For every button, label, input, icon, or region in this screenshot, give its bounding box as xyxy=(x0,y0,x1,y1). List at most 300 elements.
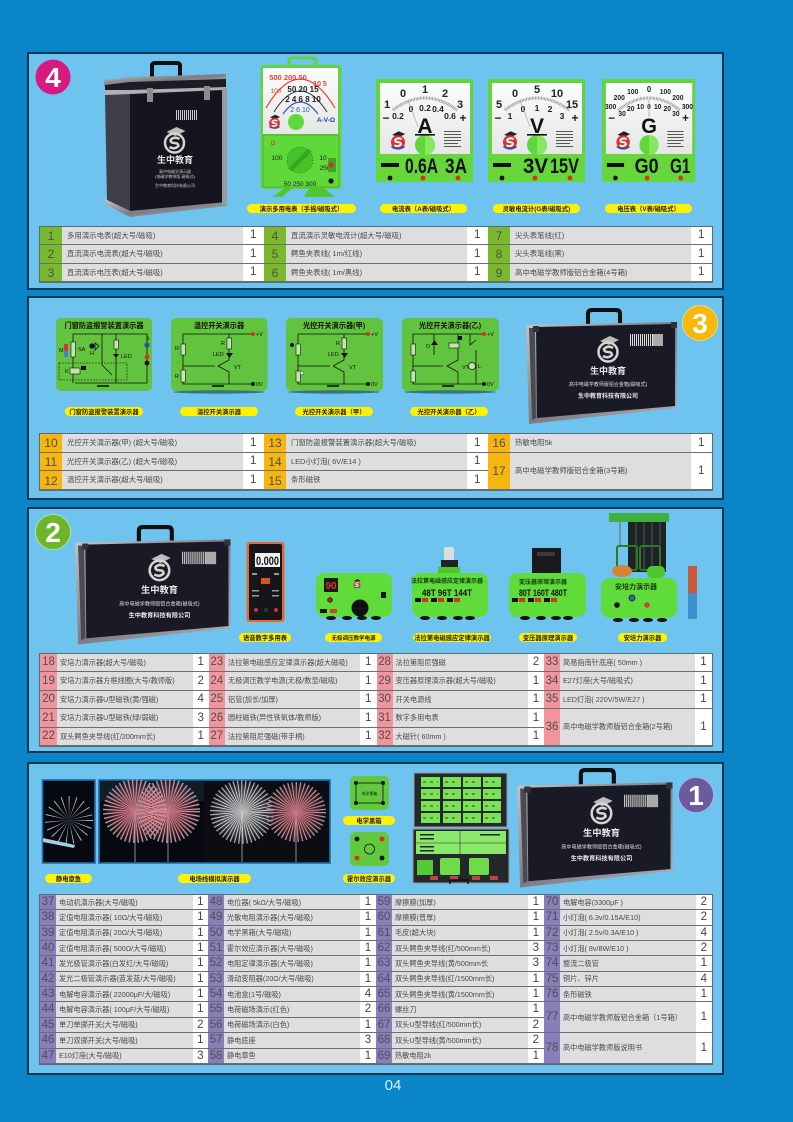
table: box 1 parts list: 光敏电阻演示器(大号/磁吸) xyxy=(227,913,313,922)
table: box 3 parts list: 17 xyxy=(492,464,506,478)
label: field lines xyxy=(178,874,251,883)
table: box 1 parts list: 76 xyxy=(546,988,558,1000)
table: box 1 parts list: 41 xyxy=(42,957,54,969)
table: box 1 parts list: 1 xyxy=(365,957,371,969)
table: box 1 parts list: 1 xyxy=(197,1034,204,1046)
label: light switch B: 光控开关演示器（乙） xyxy=(418,407,480,416)
table: box 1 parts list: 电位器( 5kΩ/大号/磁吸) xyxy=(227,898,301,907)
label: Hall effect xyxy=(343,874,395,883)
table: box 1 parts list: 49 xyxy=(210,911,222,923)
meter: galvanometer: − xyxy=(608,112,615,125)
table: box 4 parts list: 鳄鱼夹表线( 1m/黑线) xyxy=(291,268,362,277)
table: box 3 parts list: 13 xyxy=(268,436,282,450)
table: box 2 parts list: 30 xyxy=(378,693,391,705)
photo: transformer demonstrator: 80T 160T 480T xyxy=(519,588,567,598)
table: box 1 parts list: 毛皮(超大块) xyxy=(395,928,436,937)
table: box 1 parts list: 63 xyxy=(378,957,390,969)
meter: voltmeter: 3V xyxy=(523,155,548,178)
board: light switch B: D xyxy=(426,344,430,350)
board: temperature switch: R xyxy=(175,346,179,352)
board: light switch B: +V xyxy=(487,332,494,338)
meter: galvanometer: 30 xyxy=(672,111,680,118)
table: box 2 parts list: 1 xyxy=(700,721,707,733)
meter: galvanometer: 30 xyxy=(618,111,626,118)
table: box 2 parts list: 32 xyxy=(378,730,391,742)
table: box 1 parts list: 58 xyxy=(210,1050,222,1062)
board: light switch B: L xyxy=(478,364,481,370)
table: box 1 parts list: 电荷磁场演示(红色) xyxy=(227,1005,289,1014)
board: light switch B: VT xyxy=(462,365,470,371)
label: demo multimeter: 演示多用电表（手摇/磁吸式） xyxy=(260,204,343,213)
table: box 1 parts list: 1 xyxy=(365,1050,371,1062)
table: box 2 parts list: 开关电源线 xyxy=(396,695,431,704)
table: box 3 parts list: 条形磁铁 xyxy=(291,475,321,484)
meter: voltmeter: 3 xyxy=(560,111,565,121)
photo: upright aluminium case: 生中教育 xyxy=(157,154,193,165)
meter: ammeter: 3A xyxy=(445,155,467,178)
table: box 1 parts list: 50 xyxy=(210,927,222,939)
label: field lines: 电场线模拟演示器 xyxy=(189,874,240,883)
table: box 4 parts list: 尖头表笔线(黑) xyxy=(515,249,564,258)
table: box 2 parts list: 双头鳄鱼夹导线(红/200mm长) xyxy=(60,732,155,741)
meter: galvanometer xyxy=(602,79,695,182)
meter: voltmeter: 0 xyxy=(512,88,518,100)
table: box 2 parts list: 数字多用电表 xyxy=(396,713,439,722)
board: light switch A: 0V xyxy=(371,382,378,388)
board: temperature switch: 0V xyxy=(256,382,263,388)
table: box 1 parts list: 2 xyxy=(701,896,707,908)
photo: transformer demonstrator xyxy=(509,548,586,620)
table: box 2 parts list: 1 xyxy=(533,693,539,705)
label: digital multimeter xyxy=(239,633,291,642)
board: light switch B: 光控开关演示器(乙) xyxy=(419,321,482,330)
table: box 4 parts list: 直流演示电流表(超大号/磁吸) xyxy=(67,249,163,258)
meter: voltmeter: 15 xyxy=(566,99,578,111)
table: box 1 parts list: 71 xyxy=(546,911,558,923)
table: box 4 parts list: 1 xyxy=(250,248,256,260)
table: box 1 parts list: 1 xyxy=(365,1019,371,1031)
table: box 2 parts list: 1 xyxy=(533,712,539,724)
photo: demo multimeter: 100 xyxy=(272,155,283,162)
meter: ammeter: 3 xyxy=(457,99,463,111)
table: box 1 parts list: 双头鳄鱼夹导线(黄/500mm长 xyxy=(395,959,488,968)
table: box 3 parts list: 10 xyxy=(44,436,58,450)
table: box 1 parts list: 条形磁铁 xyxy=(563,990,592,999)
table: box 1 parts list: 1 xyxy=(197,911,204,923)
photo: aluminium case no. 2: 生中教育科技有限公司 xyxy=(129,612,190,620)
table: box 1 parts list: 46 xyxy=(42,1034,54,1046)
table: box 1 parts list: 高中电磁学教师版铝合金箱（1号箱） xyxy=(563,1013,682,1022)
table: box 3 parts list: 11 xyxy=(45,455,57,469)
table: box 1 parts list: 1 xyxy=(197,942,204,954)
photo: Faraday law demonstrator xyxy=(411,547,488,620)
table: box 1 parts list: 40 xyxy=(42,942,54,954)
table: box 2 parts list: 31 xyxy=(378,712,391,724)
photo: demo multimeter: 2 4 6 8 10 xyxy=(285,95,321,104)
photo: electric field line simulator xyxy=(99,779,330,863)
photo: demo multimeter: Ω xyxy=(271,140,276,147)
board: light switch A: VT xyxy=(349,365,357,371)
table: box 1 parts list: 双头鳄鱼夹导线(红/500mm长) xyxy=(395,944,490,953)
table: box 2 parts list: 25 xyxy=(210,693,223,705)
table: box 1 parts list: 62 xyxy=(378,942,390,954)
table: box 1 parts list: 3 xyxy=(533,957,539,969)
meter: voltmeter: 5 xyxy=(534,84,540,96)
board: Hall effect demonstrator xyxy=(350,832,389,866)
badge: number 2: 2 xyxy=(45,517,61,548)
label: power supply xyxy=(325,633,382,642)
table: box 3 parts list: 15 xyxy=(268,474,282,488)
meter: ammeter: A xyxy=(417,115,433,138)
photo: aluminium case no. 1 xyxy=(517,770,673,887)
meter: ammeter: − xyxy=(382,111,390,125)
table: box 3 parts list: LED小灯泡( 6V/E14 ) xyxy=(291,457,361,466)
table: box 1 parts list: 45 xyxy=(42,1019,54,1031)
photo: demo multimeter: 250 xyxy=(320,165,331,172)
table: box 1 parts list: 热敏电阻2k xyxy=(395,1051,431,1060)
label: Ampere force: 安培力演示器 xyxy=(624,633,662,642)
meter: ammeter: 1 xyxy=(384,99,390,111)
table: box 2 parts list: 1 xyxy=(533,675,539,687)
table: box 1 parts list: 滑动变阻器(20Ω/大号/磁吸) xyxy=(227,974,314,983)
table: box 1 parts list: 双头鳄鱼夹导线(红/1500mm长) xyxy=(395,974,494,983)
photo: demo multimeter: 100 xyxy=(271,88,282,95)
photo: aluminium case no. 1: 高中电磁学教师版铝合金箱(磁吸式) xyxy=(561,842,642,850)
table: box 2 parts list: 27 xyxy=(210,730,223,742)
meter: voltmeter: V xyxy=(530,115,544,138)
table: box 1 parts list: 56 xyxy=(210,1019,222,1031)
meter: ammeter: 0.6 xyxy=(444,111,456,121)
board: door and window alarm: 门窗防盗报警装置演示器 xyxy=(64,321,144,330)
table: box 2 parts list: 变压器原理演示器(超大号/磁吸) xyxy=(396,676,496,685)
photo: bar magnet xyxy=(688,566,697,619)
table: box 2 parts list: 1 xyxy=(365,730,371,742)
page number: 04 xyxy=(385,1077,401,1094)
meter: ammeter: 0 xyxy=(409,104,414,114)
meter: ammeter: 1 xyxy=(422,84,428,96)
table: box 4 parts list xyxy=(39,226,713,283)
badge: number 4: 4 xyxy=(45,62,61,93)
meter: galvanometer: 20 xyxy=(664,106,671,113)
table: box 1 parts list: 发光二极管演示器(蓝发蓝/大号/磁吸) xyxy=(59,974,176,983)
table: box 2 parts list: 安培力演示器U型磁铁(黄/强磁) xyxy=(60,695,158,704)
table: box 2 parts list: 1 xyxy=(198,656,204,668)
photo: digital multimeter: 0.000 xyxy=(256,554,279,568)
label: power supply: 无极调压教学电源 xyxy=(331,634,376,642)
table: box 2 parts list: 圆柱磁铁(异性铁氧体/教师版) xyxy=(228,713,321,722)
meter: voltmeter: 10 xyxy=(551,88,563,100)
table: box 3 parts list: 光控开关演示器(甲) (超大号/磁吸) xyxy=(67,438,177,447)
table: box 3 parts list: 1 xyxy=(698,437,704,449)
table: box 4 parts list: 9 xyxy=(496,266,502,280)
table: box 1 parts list: 1 xyxy=(533,988,539,1000)
board: door and window alarm: K xyxy=(65,369,69,375)
label: Ampere force xyxy=(618,633,667,642)
table: box 1 parts list: 59 xyxy=(378,896,390,908)
table: box 1 parts list: 78 xyxy=(546,1042,558,1054)
photo: aluminium case no. 3: 高中电磁学教师版铝合金箱(磁吸式) xyxy=(569,381,647,388)
table: box 3 parts list: 温控开关演示器(超大号/磁吸) xyxy=(67,475,163,484)
photo: demo multimeter: 10 5 xyxy=(313,81,327,88)
table: box 1 parts list: 电阻定律演示器(大号/磁吸) xyxy=(227,959,313,968)
board: temperature switch: LED xyxy=(213,352,224,358)
label: voltmeter: 电压表（V表/磁吸式） xyxy=(617,204,680,213)
table: box 2 parts list: 高中电磁学教师版铝合金箱(2号箱) xyxy=(563,722,672,731)
table: box 1 parts list: 1 xyxy=(197,957,204,969)
table: box 1 parts list: 4 xyxy=(701,973,707,985)
board: light switch B: 0V xyxy=(487,382,494,388)
panel: box 3 xyxy=(27,296,724,500)
table: box 1 parts list: 2 xyxy=(533,1019,539,1031)
table: box 1 parts list xyxy=(39,894,713,1065)
meter: galvanometer: 10 xyxy=(637,104,644,111)
table: box 1 parts list: 定值电阻演示器( 10Ω/大号/磁吸) xyxy=(59,913,162,922)
label: black box: 电学黑箱 xyxy=(356,816,382,825)
table: box 2 parts list: 4 xyxy=(198,693,204,705)
table: box 1 parts list: 单刀双掷开关(大号/磁吸) xyxy=(59,1036,138,1045)
table: box 1 parts list: 双头U型导线(红/500mm长) xyxy=(395,1020,481,1029)
table: box 1 parts list: 电池盒(1号/磁吸) xyxy=(227,990,281,999)
table: box 1 parts list: 单刀单掷开关(大号/磁吸) xyxy=(59,1020,138,1029)
table: box 1 parts list: 38 xyxy=(42,911,54,923)
table: box 2 parts list: 23 xyxy=(210,656,223,668)
table: box 1 parts list: 1 xyxy=(533,896,539,908)
meter: voltmeter: 2 xyxy=(548,104,553,114)
panel: box 2 xyxy=(27,507,724,753)
table: box 1 parts list: 1 xyxy=(533,911,539,923)
table: box 2 parts list: 1 xyxy=(700,693,707,705)
table: box 1 parts list: 42 xyxy=(42,973,54,985)
photo: aluminium case no. 3: 生中教育科技有限公司 xyxy=(578,392,638,400)
table: box 2 parts list: 铝管(加长/加厚) xyxy=(228,695,278,704)
table: box 2 parts list: 安培力演示器U型磁铁(绿/弱磁) xyxy=(60,713,158,722)
table: box 4 parts list: 尖头表笔线(红) xyxy=(515,231,564,240)
table: box 2 parts list: 1 xyxy=(365,693,371,705)
table: box 2 parts list: 19 xyxy=(42,675,55,687)
label: transformer xyxy=(519,633,577,642)
board: light switch A: +V xyxy=(371,332,378,338)
board: door and window alarm: S xyxy=(146,336,150,342)
table: box 4 parts list: 1 xyxy=(698,266,704,278)
table: box 1 parts list: 74 xyxy=(546,957,558,969)
table: box 2 parts list: 2 xyxy=(198,675,204,687)
table: box 3 parts list: 1 xyxy=(250,455,256,467)
photo: aluminium case no. 3 xyxy=(526,310,677,424)
table: box 1 parts list: 1 xyxy=(197,988,204,1000)
board: light switch B xyxy=(402,318,499,394)
table: box 2 parts list: 35 xyxy=(546,693,558,705)
table: box 1 parts list: 68 xyxy=(378,1034,390,1046)
table: box 3 parts list: 1 xyxy=(474,437,480,449)
photo: digital multimeter xyxy=(246,542,284,622)
label: door and window alarm xyxy=(65,407,143,416)
table: box 1 parts list: 37 xyxy=(42,896,54,908)
photo: Faraday law demonstrator: 48T 96T 144T xyxy=(422,588,472,598)
meter: ammeter: 0.2 xyxy=(392,111,404,121)
meter: ammeter: + xyxy=(459,111,467,125)
table: box 1 parts list: 1 xyxy=(701,1011,707,1023)
badge: number 3: 3 xyxy=(692,308,708,339)
table: box 4 parts list: 1 xyxy=(698,248,704,260)
table: box 1 parts list: 定值电阻演示器( 20Ω/大号/磁吸) xyxy=(59,928,162,937)
table: box 1 parts list: 4 xyxy=(701,927,707,939)
table: box 1 parts list: 43 xyxy=(42,988,54,1000)
photo: DC teaching power supply xyxy=(316,573,392,620)
table: box 1 parts list: E10灯座(大号/磁吸) xyxy=(59,1051,122,1060)
table: box 1 parts list: 1 xyxy=(197,927,204,939)
table: box 2 parts list: 36 xyxy=(546,721,558,733)
meter: galvanometer: G xyxy=(641,115,657,138)
label: Hall effect: 霍尔效应演示器 xyxy=(347,874,392,883)
table: box 3 parts list: 16 xyxy=(492,436,506,450)
meter: galvanometer: 300 xyxy=(682,104,693,111)
table: box 1 parts list: 2 xyxy=(365,1003,371,1015)
photo: demo multimeter xyxy=(260,58,342,197)
meter: galvanometer: 200 xyxy=(614,95,625,102)
meter: galvanometer: 200 xyxy=(672,95,684,102)
meter: voltmeter: − xyxy=(494,111,502,125)
table: box 4 parts list: 1 xyxy=(474,229,480,241)
table: box 2 parts list xyxy=(39,653,713,747)
badge: number 3 xyxy=(682,306,718,340)
table: box 1 parts list: 65 xyxy=(378,988,390,1000)
label: galvanometer: 灵敏电流计(G表/磁吸式) xyxy=(503,204,570,213)
photo: upright aluminium case: (电磁学教师版-磁吸式) xyxy=(155,173,196,179)
table: box 3 parts list: 高中电磁学教师版铝合金箱(3号箱) xyxy=(515,466,628,475)
photo: Faraday law demonstrator: 法拉第电磁感应定律演示器 xyxy=(411,577,483,585)
table: box 1 parts list: 静电底座 xyxy=(227,1036,256,1045)
table: box 1 parts list: 1 xyxy=(197,1003,204,1015)
table: box 1 parts list: 小灯泡( 2.5v/0.3A/E10 ) xyxy=(563,928,638,937)
table: box 1 parts list: 1 xyxy=(365,927,371,939)
table: box 1 parts list: 电解电容(3300μF ) xyxy=(563,898,623,907)
meter: galvanometer: 300 xyxy=(605,104,616,111)
table: box 3 parts list: 14 xyxy=(268,455,282,469)
photo: upright aluminium case: 高中电磁学演示器 xyxy=(159,168,191,174)
meter: galvanometer: G1 xyxy=(670,155,690,178)
table: box 1 parts list: 螺丝刀 xyxy=(395,1005,417,1014)
table: box 2 parts list: LED灯泡( 220V/5W/E27 ) xyxy=(563,695,644,704)
table: box 4 parts list: 高中电磁学教师版铝合金箱(4号箱) xyxy=(515,268,628,277)
photo: upright aluminium case: 生中教育科技有限公司 xyxy=(155,182,195,188)
table: box 1 parts list: 73 xyxy=(546,942,558,954)
meter: voltmeter: 0 xyxy=(521,104,526,114)
table: box 3 parts list: 门窗防盗报警装置演示器(超大号/磁吸) xyxy=(291,438,416,447)
meter: ammeter: 0.4 xyxy=(432,104,444,114)
panel: box 4 xyxy=(27,52,724,290)
table: box 4 parts list: 1 xyxy=(48,229,54,243)
table: box 1 parts list: 1 xyxy=(533,973,539,985)
table: box 2 parts list: 3 xyxy=(198,712,204,724)
table: box 1 parts list: 47 xyxy=(42,1050,54,1062)
table: box 3 parts list: 1 xyxy=(474,474,480,486)
table: box 1 parts list: 2 xyxy=(533,1034,539,1046)
meter: galvanometer: 100 xyxy=(627,89,639,96)
table: box 1 parts list: 1 xyxy=(701,1042,707,1054)
table: box 1 parts list: 1 xyxy=(533,1003,539,1015)
label: temperature switch: 温控开关演示器 xyxy=(197,407,242,416)
panel: box 1 xyxy=(27,762,724,1075)
board: electrical black box xyxy=(350,776,389,810)
table: box 1 parts list: 66 xyxy=(378,1003,390,1015)
table: box 2 parts list: 33 xyxy=(546,656,558,668)
table: box 1 parts list: 48 xyxy=(210,896,222,908)
table: box 1 parts list: 1 xyxy=(197,896,204,908)
table: box 1 parts list: 摩擦膜(加厚) xyxy=(395,898,436,907)
table: box 1 parts list: 2 xyxy=(701,942,707,954)
label: demo multimeter xyxy=(247,204,356,213)
board: door and window alarm xyxy=(56,318,152,391)
label: light switch B xyxy=(410,407,488,416)
meter: voltmeter: 5 xyxy=(496,99,502,111)
table: box 1 parts list: 整流二极管 xyxy=(563,959,599,968)
meter: voltmeter: + xyxy=(571,111,579,125)
meter: galvanometer: + xyxy=(682,112,689,125)
board: temperature switch: R xyxy=(175,374,179,380)
label: digital multimeter: 语音数字多用表 xyxy=(243,633,288,642)
label: light switch A xyxy=(295,407,373,416)
meter: voltmeter: 1 xyxy=(535,103,540,113)
meter: ammeter: 0 xyxy=(400,88,406,100)
table: box 1 parts list: 77 xyxy=(546,1011,558,1023)
board: temperature switch: R xyxy=(221,341,225,347)
table: box 2 parts list: 安培力演示器方框线圈(大号/教师版) xyxy=(60,676,175,685)
table: box 1 parts list: 2 xyxy=(701,911,707,923)
meter: galvanometer: 100 xyxy=(660,89,671,96)
table: box 4 parts list: 1 xyxy=(474,266,480,278)
label: voltmeter xyxy=(605,204,692,213)
table: box 1 parts list: 53 xyxy=(210,973,222,985)
table: box 1 parts list: 电解电容演示器( 100μF/大号/磁吸) xyxy=(59,1005,169,1014)
label: octopus xyxy=(45,874,92,883)
table: box 1 parts list: 4 xyxy=(365,988,371,1000)
photo: demo multimeter: 2 6 10 xyxy=(290,107,310,114)
label: black box xyxy=(343,816,395,825)
table: box 4 parts list: 2 xyxy=(48,247,54,261)
table: box 1 parts list: 双头鳄鱼夹导线(黄/1500mm长) xyxy=(395,990,494,999)
table: box 3 parts list: 1 xyxy=(250,437,256,449)
table: box 2 parts list: 1 xyxy=(365,675,371,687)
label: light switch A: 光控开关演示器（甲） xyxy=(303,407,365,416)
photo: aluminium case no. 2 xyxy=(75,527,231,644)
table: box 2 parts list: 2 xyxy=(533,656,539,668)
label: door and window alarm: 门窗防盗报警装置演示器 xyxy=(69,407,139,416)
table: box 2 parts list: 1 xyxy=(700,656,707,668)
label: Faraday law: 法拉第电磁感应定律演示器 xyxy=(414,633,490,642)
table: box 1 parts list: 摩擦膜(普厚) xyxy=(395,913,436,922)
table: box 1 parts list: 64 xyxy=(378,973,390,985)
table: box 1 parts list: 70 xyxy=(546,896,558,908)
table: box 2 parts list: 1 xyxy=(198,730,204,742)
table: box 1 parts list: 小灯泡( 8v/8W/E10 ) xyxy=(563,944,628,953)
board: door and window alarm: LED xyxy=(121,354,132,360)
photo: upright aluminium case xyxy=(104,63,227,217)
photo: demo multimeter: 10 xyxy=(319,155,327,162)
photo: aluminium case no. 2: 高中电磁学教师版铝合金箱(磁吸式) xyxy=(119,599,200,607)
table: box 1 parts list: 72 xyxy=(546,927,558,939)
meter: galvanometer: G0 xyxy=(635,155,659,178)
table: box 3 parts list: 热敏电阻5k xyxy=(515,438,552,447)
board: light switch A: 光控开关演示器(甲) xyxy=(303,321,366,330)
table: box 1 parts list: 44 xyxy=(42,1003,54,1015)
table: box 2 parts list: 1 xyxy=(365,712,371,724)
label: transformer: 变压器原理演示器 xyxy=(523,633,574,642)
table: box 2 parts list: 无极调压教学电源(无极/数显/磁吸) xyxy=(228,676,337,685)
badge: number 2 xyxy=(36,514,70,550)
table: box 4 parts list: 直流演示电压表(超大号/磁吸) xyxy=(67,268,163,277)
board: door and window alarm: SA xyxy=(78,347,86,353)
board: temperature switch: +V xyxy=(256,332,263,338)
